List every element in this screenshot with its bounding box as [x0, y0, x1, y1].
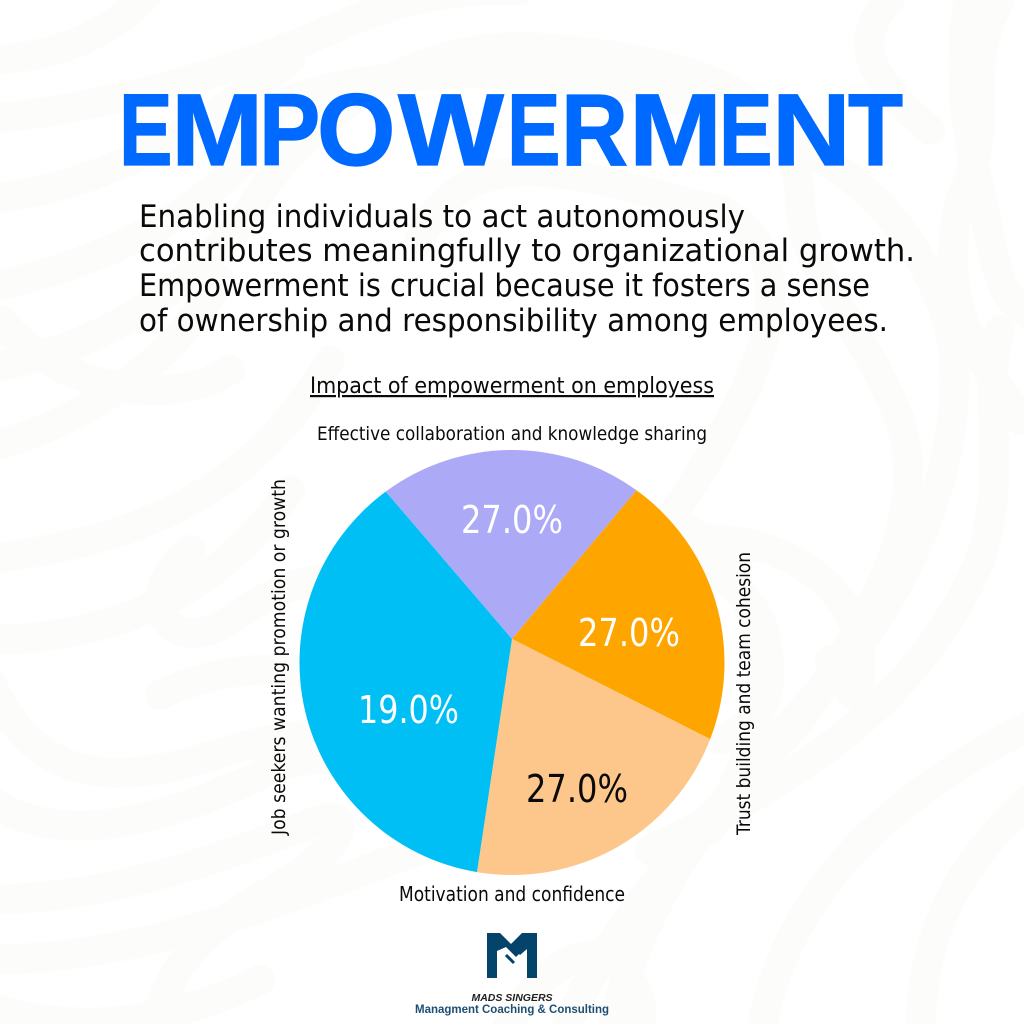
description text: Enabling individuals to act autonomously	[139, 199, 745, 235]
title: M	[171, 73, 263, 187]
label: motivation: Motivation and confidence	[399, 882, 625, 906]
slice: motivation	[477, 639, 710, 875]
logo	[415, 933, 609, 1016]
company tagline: Managment Coaching & Consulting	[415, 1002, 609, 1016]
title: W	[398, 73, 503, 187]
description text: Empowerment is crucial because it fosters a sense	[139, 268, 870, 304]
value: job seekers: 19.0%	[358, 688, 459, 732]
title: M	[629, 73, 722, 187]
icon: M mark	[487, 933, 537, 978]
title	[119, 73, 903, 187]
title: E	[507, 73, 561, 187]
value: collaboration: 27.0%	[461, 498, 563, 542]
title: R	[561, 73, 628, 187]
description text: contributes meaningfully to organizational growth.	[139, 233, 915, 269]
title: N	[772, 73, 851, 187]
company name: MADS SINGERS	[471, 992, 553, 1004]
title: E	[719, 73, 773, 187]
title: T	[848, 73, 903, 187]
value: trust: 27.0%	[578, 611, 680, 655]
slice: effective collaboration	[386, 450, 636, 639]
value: motivation: 27.0%	[526, 767, 628, 811]
title: P	[259, 73, 320, 187]
pie chart	[299, 450, 724, 875]
chart heading: Impact of empowerment on employess	[310, 374, 714, 399]
slice: job seekers	[299, 492, 512, 872]
label: job seekers: Job seekers wanting promotion or growth	[268, 479, 290, 836]
description text: of ownership and responsibility among employees.	[139, 303, 888, 339]
title: O	[317, 73, 395, 187]
title: E	[119, 73, 172, 187]
label: trust: Trust building and team cohesion	[733, 552, 755, 836]
description text	[139, 199, 915, 339]
slice: trust building	[512, 490, 724, 739]
label: collaboration: Effective collaboration and knowledge sharing	[317, 423, 707, 445]
